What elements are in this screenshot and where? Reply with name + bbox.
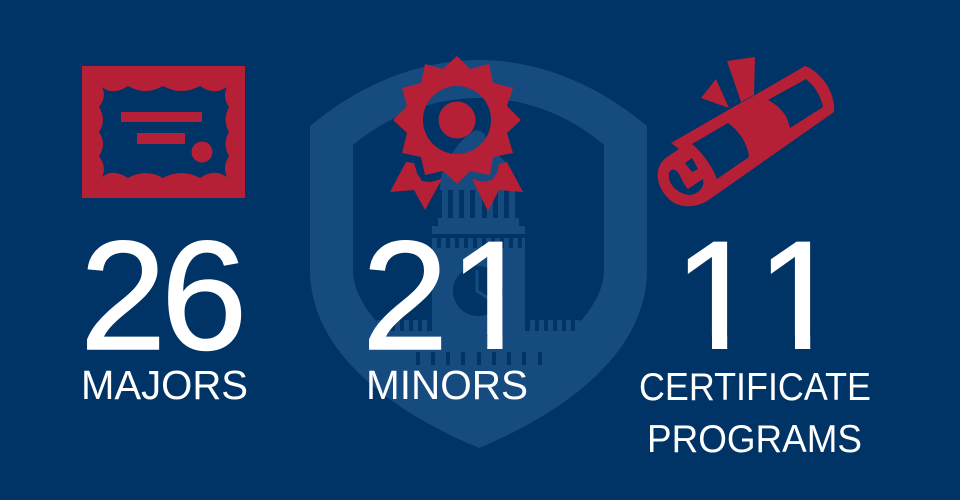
label: minors: MINORS <box>366 362 528 408</box>
watermark: shield with clock tower <box>310 60 647 448</box>
number: 21: 21 <box>362 209 535 382</box>
stat: minors <box>369 240 526 400</box>
label: programs: PROGRAMS <box>647 418 862 461</box>
label: majors: MAJORS <box>81 362 248 408</box>
icon: diploma scroll <box>658 57 834 206</box>
tower <box>377 130 580 352</box>
stat: majors <box>80 209 248 408</box>
number: 26: 26 <box>80 209 247 382</box>
stat: certificate programs <box>640 242 870 452</box>
icon: certificate <box>82 66 245 198</box>
number: 11: 11 <box>674 209 843 382</box>
icon: award rosette <box>390 56 523 211</box>
label: certificate: CERTIFICATE <box>639 366 871 409</box>
